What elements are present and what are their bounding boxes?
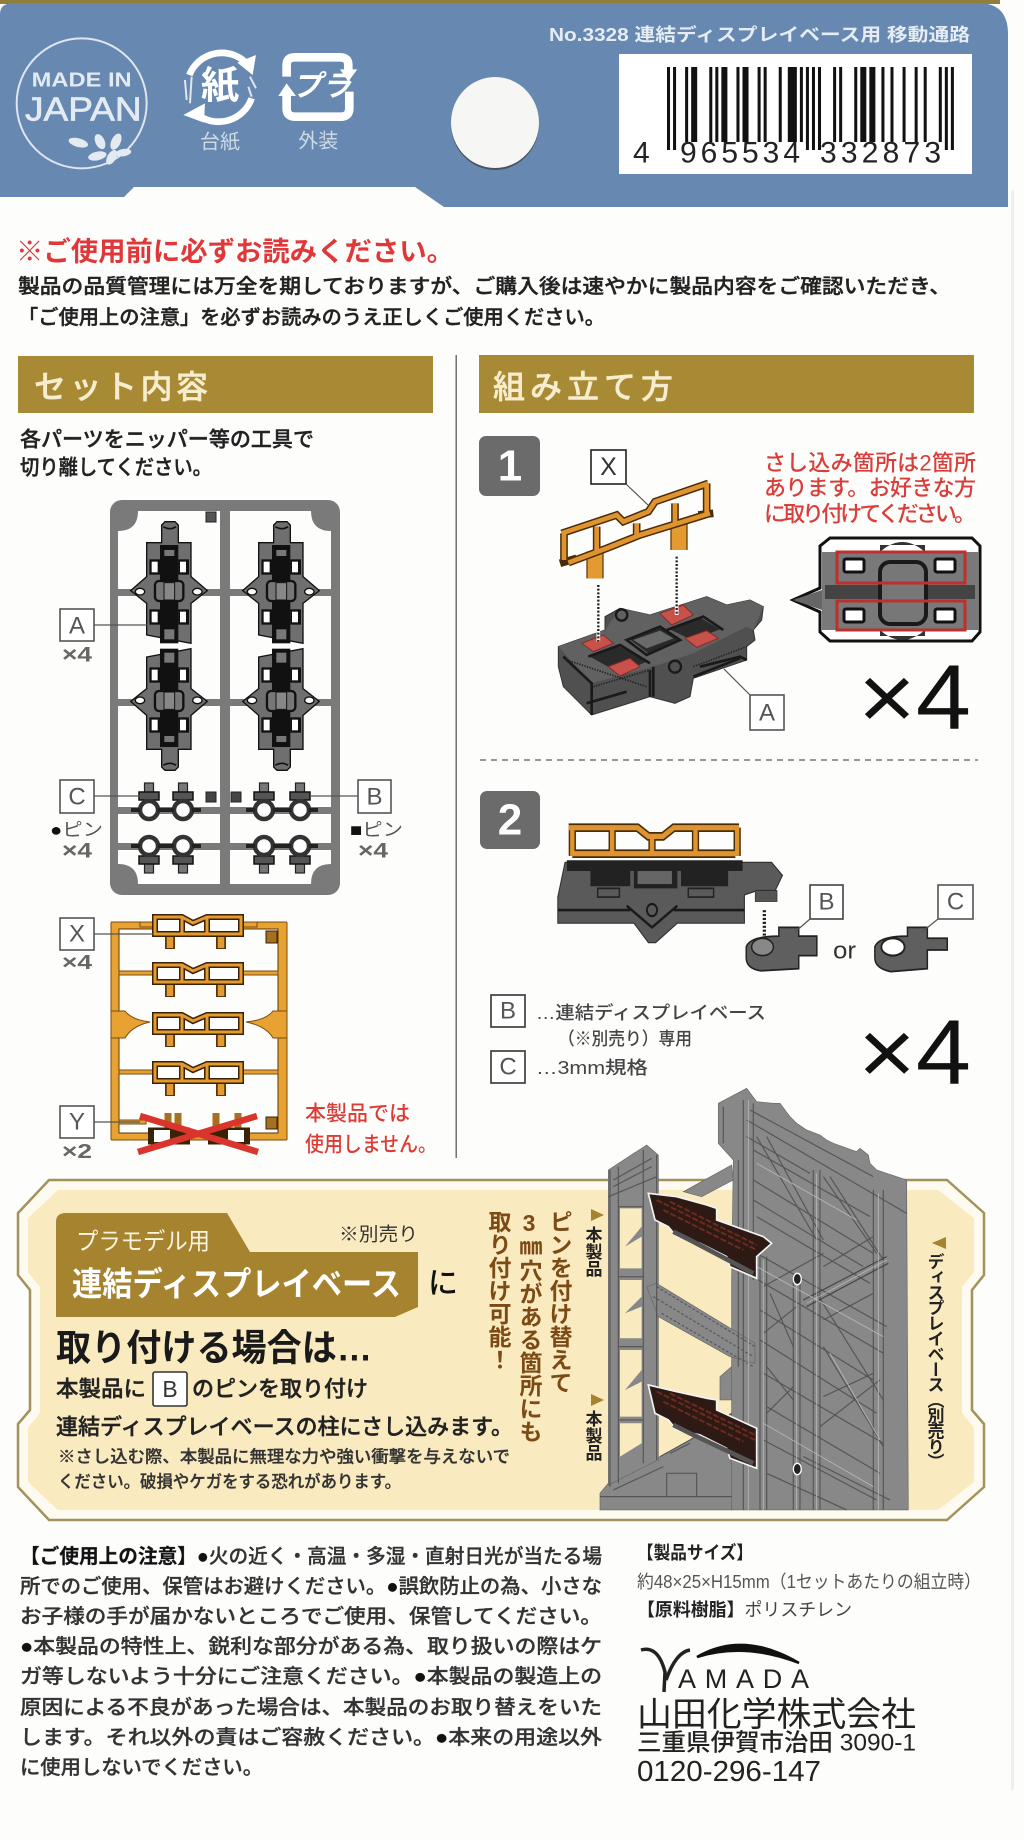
label B: B (366, 784, 383, 810)
panel warning small text: ※さし込む際、本製品に無理な力や強い衝撃を与えないで (58, 1448, 510, 1466)
label X: X (69, 920, 85, 948)
company name and contact: 山田化学株式会社 (637, 1696, 916, 1734)
legend B and C (491, 995, 766, 1083)
product specs: 【原料樹脂】ポリスチレン (637, 1600, 852, 1620)
step 1 badge (479, 436, 540, 496)
label Y: ×2 (62, 1141, 92, 1163)
barcode (619, 54, 972, 174)
step 2 illustration (558, 828, 947, 972)
legend B and C: …3mm規格 (536, 1058, 648, 1078)
label X: ×4 (62, 952, 93, 974)
note: not used: 本製品では (305, 1102, 410, 1126)
section bar: assembly: 組み立て方 (493, 369, 673, 405)
orange runner (111, 917, 287, 1142)
legend B and C: …連結ディスプレイベース (536, 1002, 766, 1023)
product specs (637, 1542, 981, 1620)
lattice lines (600, 1100, 907, 1510)
label B step 2 (795, 885, 843, 932)
vertical note brown: 3㎜穴がある箇所にも (516, 1210, 542, 1443)
cut instruction text: 切り離してください。 (20, 456, 212, 480)
hanger hole (451, 77, 539, 170)
company name and contact: 0120-296-147 (637, 1756, 821, 1788)
section bar: set contents (18, 356, 433, 413)
callout: display base: ディスプレイベース（別売り） (924, 1252, 944, 1469)
panel: connection display base: に (428, 1268, 458, 1300)
dotted guides (598, 557, 677, 642)
label A: A (69, 612, 85, 640)
callouts: this product: 本製品 (582, 1226, 602, 1277)
icon: paper recycle: 紙 (201, 64, 239, 107)
intro text: 「ご使用上の注意」を必ずお読みのうえ正しくご使用ください。 (18, 306, 605, 329)
insertion note red: あります。お好きな方 (764, 476, 976, 500)
made in japan badge: MADE IN (32, 70, 132, 92)
panel: connection display base (18, 1180, 984, 1520)
label A: ×4 (62, 644, 92, 666)
or: or (833, 938, 856, 964)
note: not used (305, 1102, 437, 1156)
step 1 illustration (558, 483, 763, 715)
usage cautions: お子様の手が届かないところでご使用、保管してください。 (20, 1605, 602, 1628)
sold separately note: ※別売り (339, 1224, 418, 1246)
display base structure (600, 1088, 908, 1510)
gold title label: プラモデル用 (76, 1228, 210, 1256)
assembled base (558, 860, 782, 943)
part X x4 (155, 917, 241, 1096)
panel instructions: B (162, 1376, 178, 1402)
assembled fence (569, 828, 739, 856)
step 1 badge: 1 (498, 442, 522, 490)
insertion note red (764, 450, 976, 526)
note: not used: 使用しません。 (305, 1134, 437, 1156)
product specs: 約48×25×H15mm（1セットあたりの組立時） (637, 1572, 981, 1592)
callouts: this product: 本製品 (582, 1410, 602, 1461)
panel heading: 取り付ける場合は… (56, 1328, 372, 1368)
pins B and C (131, 783, 318, 873)
product on base, lower (648, 1385, 757, 1468)
product on base, upper (648, 1193, 772, 1278)
gold title label (56, 1213, 418, 1317)
barcode: 965534 (680, 136, 800, 170)
usage cautions: します。それ以外の責はご容赦ください。 ●本来の用途以外 (20, 1726, 602, 1749)
label X step 1: X (600, 453, 617, 481)
label X (60, 918, 153, 974)
label C step 2: C (947, 888, 964, 916)
recycle captions (200, 130, 338, 154)
panel warning small text: ください。破損やケガをする恐れがあります。 (58, 1472, 401, 1492)
legend B and C: B (500, 998, 516, 1024)
intro text (18, 275, 951, 329)
company name and contact: 三重県伊賀市治田 3090-1 (637, 1730, 916, 1756)
intro text: 製品の品質管理には万全を期しておりますが、ご購入後は速やかに製品内容をご確認いただき、 (18, 275, 951, 298)
label A (60, 609, 147, 666)
legend B and C: C (499, 1054, 517, 1080)
pin B (746, 927, 817, 971)
label C step 2 (922, 885, 973, 932)
section bar: assembly (479, 355, 974, 413)
vertical note brown: 取り付け可能！ (485, 1210, 512, 1371)
insertion note red: に取り付けてください。 (764, 502, 976, 526)
panel instructions: 本製品に (56, 1376, 146, 1402)
part A x4 (131, 522, 319, 770)
callouts: this product (582, 1209, 604, 1461)
icon: plastic recycle (278, 57, 357, 117)
label C: C (68, 784, 86, 810)
header band (0, 3, 1008, 207)
ladder windows (620, 1208, 642, 1457)
cut instruction text (20, 428, 314, 480)
made in japan badge: JAPAN (25, 91, 142, 128)
label Y (60, 1106, 140, 1163)
logo: yamada (641, 1645, 809, 1694)
section bar: set contents: セット内容 (34, 369, 208, 405)
vertical note brown: ピンを付け替えて (546, 1210, 572, 1394)
barcode: 4 (633, 136, 650, 170)
vertical note brown (485, 1210, 572, 1443)
label Y: Y (69, 1108, 85, 1136)
red cross mark (138, 1116, 258, 1152)
part X orange (560, 483, 713, 578)
gray runner (110, 500, 340, 895)
callout: top view (793, 538, 980, 641)
panel instructions: のピンを取り付け (192, 1376, 368, 1402)
base part A (558, 597, 763, 715)
warning heading: ※ご使用前に必ずお読みください。 (16, 236, 454, 267)
step 2 badge: 2 (498, 796, 522, 844)
legend B and C: （※別売り）専用 (558, 1029, 692, 1049)
usage cautions: 所でのご使用、保管はお避けください。 ●誤飲防止の為、小さな (20, 1575, 602, 1598)
label C: ●ピン (50, 820, 103, 840)
product title: No.3328 連結ディスプレイベース用 移動通路 (549, 24, 970, 45)
insertion note red: さし込み箇所は2箇所 (764, 450, 976, 476)
label C (50, 780, 140, 862)
panel instructions: 連結ディスプレイベースの柱にさし込みます。 (56, 1414, 513, 1440)
usage cautions: ●本製品の特性上、鋭利な部分がある為、取り扱いの際はケ (20, 1635, 602, 1658)
usage cautions: 【ご使用上の注意】●火の近く・高温・多湿・直射日光が当たる場 (20, 1544, 602, 1568)
icon: paper recycle (183, 53, 256, 123)
times four step 1: ×4 (858, 647, 971, 749)
gold title label: 連結ディスプレイベース (72, 1266, 401, 1302)
part Y (148, 1113, 250, 1142)
panel instructions (56, 1372, 513, 1440)
label A step 1: A (759, 700, 775, 726)
label X step 1 (591, 450, 648, 505)
logo: yamada: AMADA (678, 1664, 809, 1694)
cut instruction text: 各パーツをニッパー等の工具で (20, 428, 314, 452)
icon: plastic recycle: プラ (292, 70, 353, 103)
label A step 1 (724, 669, 784, 730)
step 2 badge (480, 791, 540, 849)
recycle captions: 外装 (298, 130, 338, 153)
usage cautions (20, 1544, 602, 1779)
label B: ■ピン (350, 820, 403, 840)
label B step 2: B (818, 888, 835, 916)
company name and contact (637, 1696, 916, 1788)
usage cautions: ガ等しないよう十分にご注意ください。 ●本製品の製造上の (20, 1665, 602, 1688)
panel warning small text (58, 1448, 510, 1492)
red insertion slots (582, 605, 718, 676)
label B (310, 780, 403, 862)
label B: ×4 (358, 840, 388, 862)
times four step 2: ×4 (858, 1002, 971, 1104)
usage cautions: 原因による不良があった場合は、本製品のお取り替えをいた (20, 1696, 602, 1719)
recycle captions: 台紙 (200, 131, 240, 154)
usage cautions: に使用しないでください。 (20, 1756, 263, 1779)
label C: ×4 (62, 840, 92, 862)
product specs: 【製品サイズ】 (637, 1542, 753, 1563)
pin C (875, 927, 947, 972)
barcode: 332873 (820, 136, 941, 170)
made in japan badge (17, 38, 147, 168)
